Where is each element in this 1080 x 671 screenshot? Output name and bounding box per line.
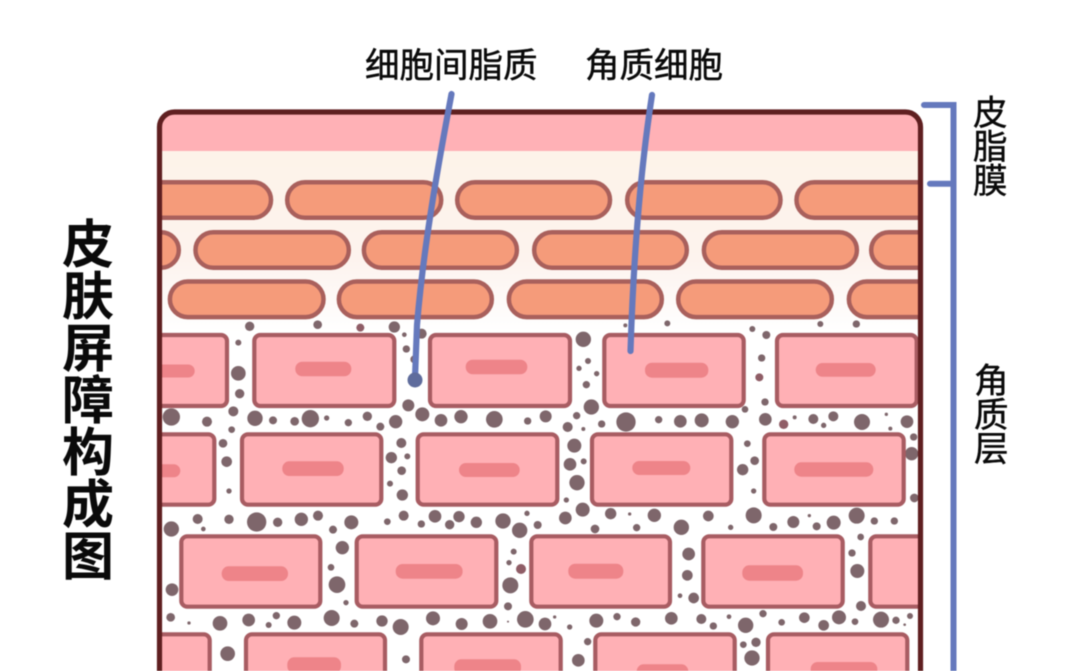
title: 成 bbox=[62, 477, 114, 535]
title: 构 bbox=[62, 425, 114, 483]
panel outline bbox=[160, 112, 920, 671]
label: sebum film: 膜 bbox=[973, 163, 1008, 201]
title: 障 bbox=[62, 373, 114, 431]
label: stratum corneum: 层 bbox=[974, 431, 1008, 469]
corneocyte pills: upper stratum corneum bbox=[161, 179, 919, 320]
layer: cream background bbox=[162, 151, 918, 296]
label: sebum film: 脂 bbox=[973, 129, 1008, 167]
label: intercellular lipid: 细胞间脂质 bbox=[365, 48, 538, 86]
label: sebum film: 皮 bbox=[973, 95, 1008, 133]
leader line: intercellular lipid bbox=[408, 94, 452, 388]
title: 肤 bbox=[62, 269, 114, 327]
title: 皮 bbox=[62, 217, 114, 275]
bracket: sebum film and stratum corneum bbox=[924, 105, 954, 671]
leader line: corneocyte bbox=[630, 95, 652, 351]
intercellular lipid dots bbox=[163, 320, 919, 667]
label: stratum corneum: 角 bbox=[974, 363, 1008, 401]
title: 图 bbox=[62, 529, 114, 587]
label: stratum corneum bbox=[974, 363, 1008, 469]
panel: skin cross-section bbox=[156, 108, 924, 671]
cell nuclei bars bbox=[150, 360, 877, 671]
label: corneocyte: 角质细胞 bbox=[585, 48, 723, 86]
label: sebum film bbox=[973, 95, 1008, 201]
title: 屏 bbox=[62, 321, 114, 379]
keratinocyte brick cells bbox=[161, 332, 919, 671]
label: stratum corneum: 质 bbox=[974, 397, 1008, 435]
layer: sebum film band bbox=[158, 110, 922, 151]
title bbox=[62, 217, 114, 587]
